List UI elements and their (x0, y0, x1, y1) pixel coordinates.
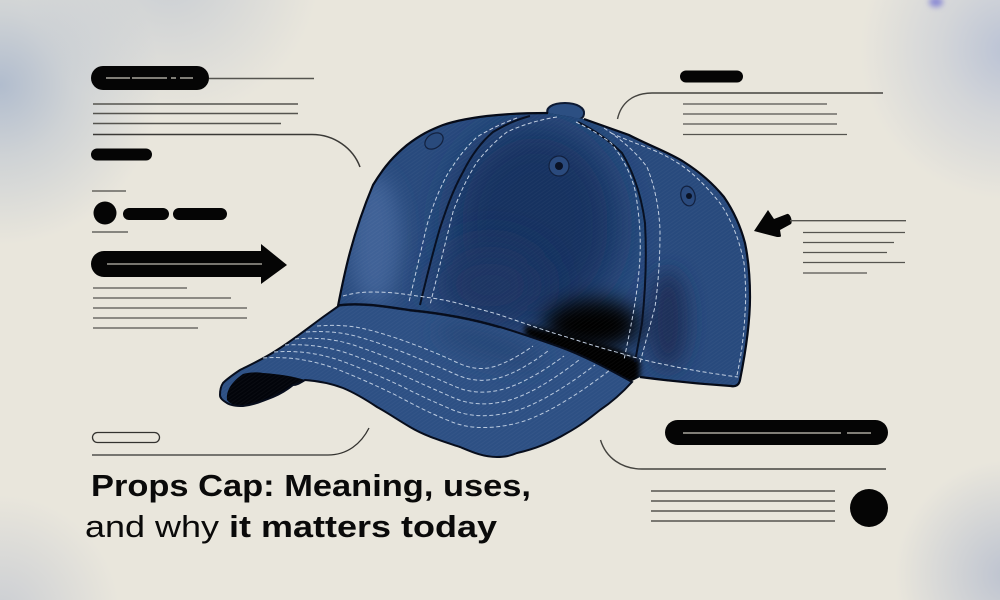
top-right text lines (683, 104, 847, 134)
top-right leader line (618, 93, 883, 119)
crown outline (338, 113, 750, 386)
top-left callout (91, 66, 360, 167)
top-right callout (618, 70, 883, 134)
bottom-left callout (92, 428, 369, 455)
top-right pill (680, 70, 743, 82)
bottom-right leader line (600, 440, 886, 469)
brim outline (220, 304, 632, 457)
bottom-left leader line (92, 428, 369, 455)
bottom-right text lines (651, 491, 835, 521)
arrow text lines (93, 288, 247, 328)
top-left text lines (93, 78, 314, 124)
title (85, 468, 531, 544)
crown stitching (409, 117, 746, 375)
cap band stitching (343, 292, 738, 377)
cap brim (215, 300, 645, 460)
bullet row (92, 191, 221, 232)
right callout lines (790, 221, 906, 273)
outlined pill (92, 432, 160, 442)
bottom-right dot (850, 489, 888, 527)
bullet dot (94, 202, 116, 224)
baseball cap illustration (215, 100, 760, 460)
left-pointing arrow (754, 210, 792, 237)
top-left label pill (91, 66, 209, 90)
small pill (91, 148, 152, 160)
eyelets (422, 130, 697, 207)
crown seams (420, 116, 646, 362)
cap button (547, 103, 584, 119)
brim stitching (263, 325, 610, 428)
bottom-right pill (665, 420, 888, 445)
top-left leader line (93, 134, 360, 167)
left arrow callout (91, 244, 287, 328)
right arrow callout (754, 210, 906, 273)
cap crown (340, 113, 749, 386)
brim underside (227, 372, 305, 406)
right-pointing arrow (91, 244, 287, 284)
bullet pills (129, 208, 221, 220)
title line two: and why it matters today (85, 509, 498, 544)
bottom-right callout (600, 420, 888, 527)
title line one: Props Cap: Meaning, uses, (91, 468, 531, 503)
